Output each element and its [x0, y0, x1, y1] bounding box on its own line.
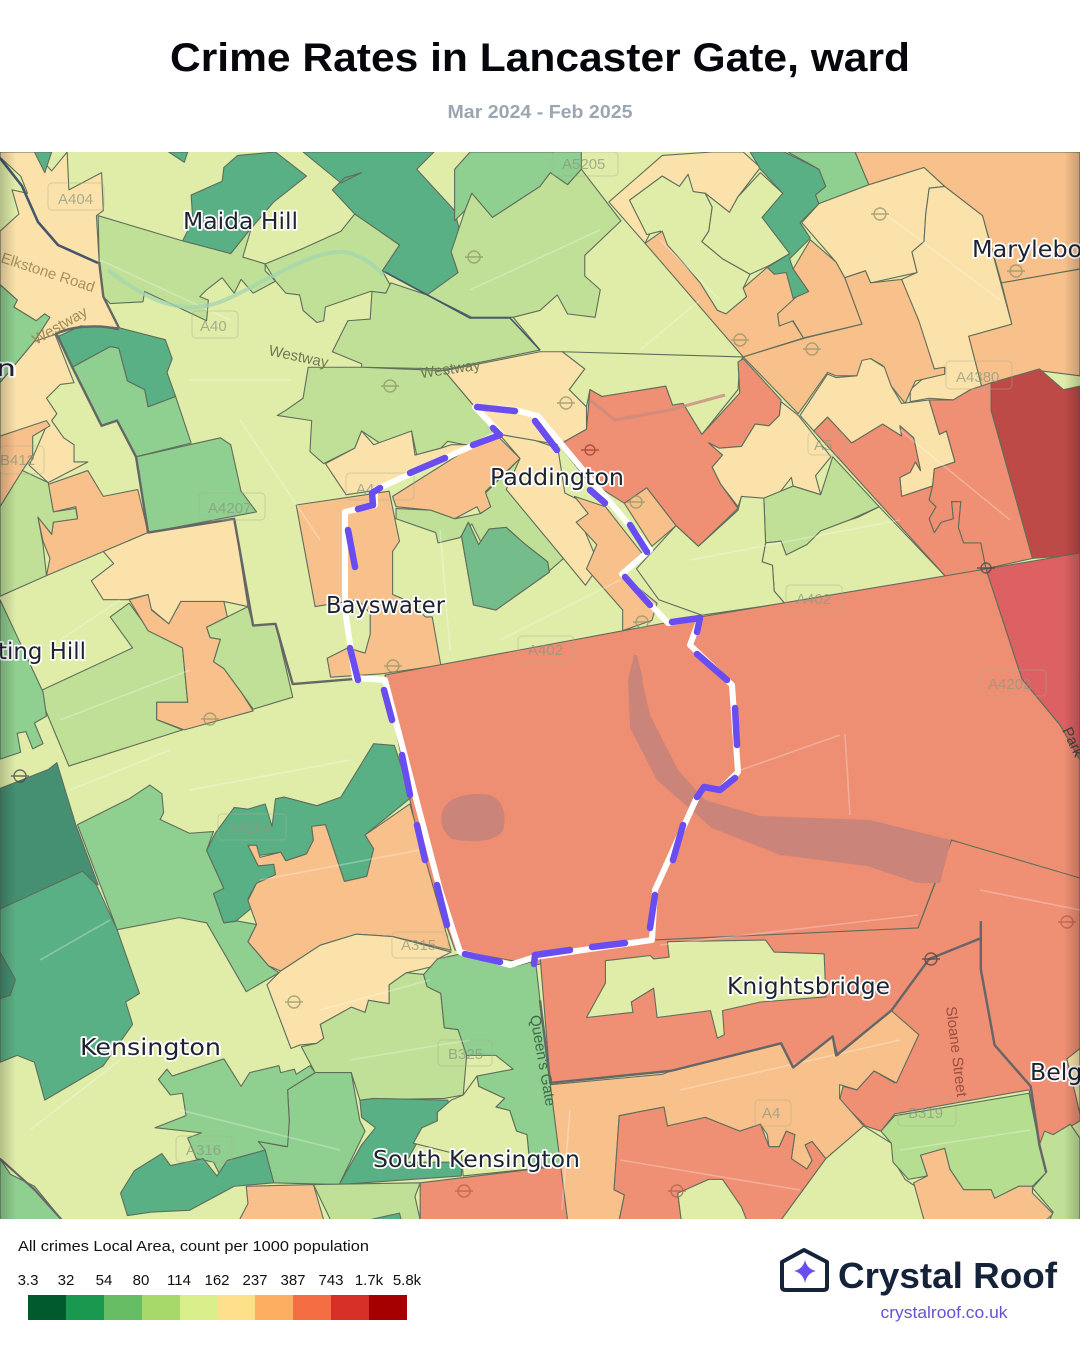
road name labels: Elkstone Road	[0, 250, 97, 296]
road shields: A4380	[956, 369, 999, 386]
legend scale labels: 743	[318, 1272, 344, 1289]
choropleth map	[0, 152, 1080, 1220]
road name labels	[0, 250, 1080, 1107]
road shields: B319	[908, 1105, 943, 1122]
boundary purple dashes	[348, 407, 737, 964]
place labels: Maida Hill	[183, 209, 298, 235]
road name labels: Sloane Street	[942, 1005, 970, 1099]
road shields: A315	[401, 937, 436, 954]
place labels: Kensington	[80, 1035, 221, 1061]
street texture	[30, 210, 1080, 1210]
map areas north-west	[0, 152, 621, 766]
water: round pond and Serpentine	[441, 655, 951, 883]
road shields	[0, 152, 1046, 1162]
logo: Crystal Roof house icon	[782, 1250, 827, 1290]
road shields: A316	[186, 1142, 221, 1159]
road shields: A40	[200, 318, 227, 335]
title: Crime Rates in Lancaster Gate, ward	[170, 36, 910, 80]
place labels: Knightsbridge	[727, 974, 890, 1000]
place labels	[0, 209, 1080, 1173]
road shields: B325	[448, 1046, 483, 1063]
road shields: A4204	[228, 820, 271, 837]
road shields: A4202	[988, 676, 1031, 693]
place labels: Paddington	[490, 465, 624, 491]
road name labels: Westway	[419, 357, 482, 382]
legend scale labels: 32	[58, 1272, 74, 1289]
road shields: B412	[0, 452, 35, 469]
legend colour bar	[28, 1295, 407, 1320]
boundary white base line	[345, 407, 738, 965]
legend scale labels: 3.3	[18, 1272, 38, 1289]
road shields: A4207	[208, 500, 251, 517]
ward boundary: Lancaster Gate	[345, 407, 738, 965]
legend scale labels: 54	[96, 1272, 112, 1289]
road name labels: Westway	[267, 342, 330, 372]
legend scale labels: 5.8k	[393, 1272, 422, 1289]
road shields: A4	[762, 1105, 780, 1122]
legend scale labels: 80	[133, 1272, 149, 1289]
road name labels: Queen's Gate	[526, 1014, 559, 1107]
website link: crystalroof.co.uk	[880, 1304, 1008, 1322]
road shields: A404	[58, 191, 93, 208]
road shields: A4	[356, 481, 374, 498]
map edge shading	[0, 152, 1080, 1219]
legend scale labels: 387	[280, 1272, 306, 1289]
subtitle: date range: Mar 2024 - Feb 2025	[448, 102, 632, 122]
road shields: A5	[814, 437, 832, 454]
legend scale labels: 237	[242, 1272, 268, 1289]
tube station icons	[11, 208, 1076, 1197]
place labels: South Kensington	[373, 1147, 580, 1173]
place labels: ting Hill	[0, 639, 86, 665]
map areas north-east	[559, 152, 1080, 631]
map areas south-west	[0, 744, 568, 1220]
legend title: All crimes Local Area, count per 1000 population	[18, 1238, 369, 1255]
logo wordmark: Crystal Roof	[838, 1255, 1058, 1296]
place labels: Bayswater	[326, 593, 446, 619]
legend scale labels: 114	[167, 1272, 191, 1289]
legend scale labels: 1.7k	[355, 1272, 384, 1289]
legend scale labels	[18, 1272, 422, 1289]
road shields: A402	[528, 642, 563, 659]
road shields: A402	[796, 591, 831, 608]
road name labels: Westway	[30, 303, 91, 348]
Hyde Park and Kensington Gardens area	[385, 553, 1080, 965]
borough boundaries and railway lines	[0, 158, 1046, 1220]
legend scale labels: 162	[204, 1272, 230, 1289]
road shields: A5205	[562, 156, 605, 173]
map areas south-east	[540, 840, 1080, 1220]
